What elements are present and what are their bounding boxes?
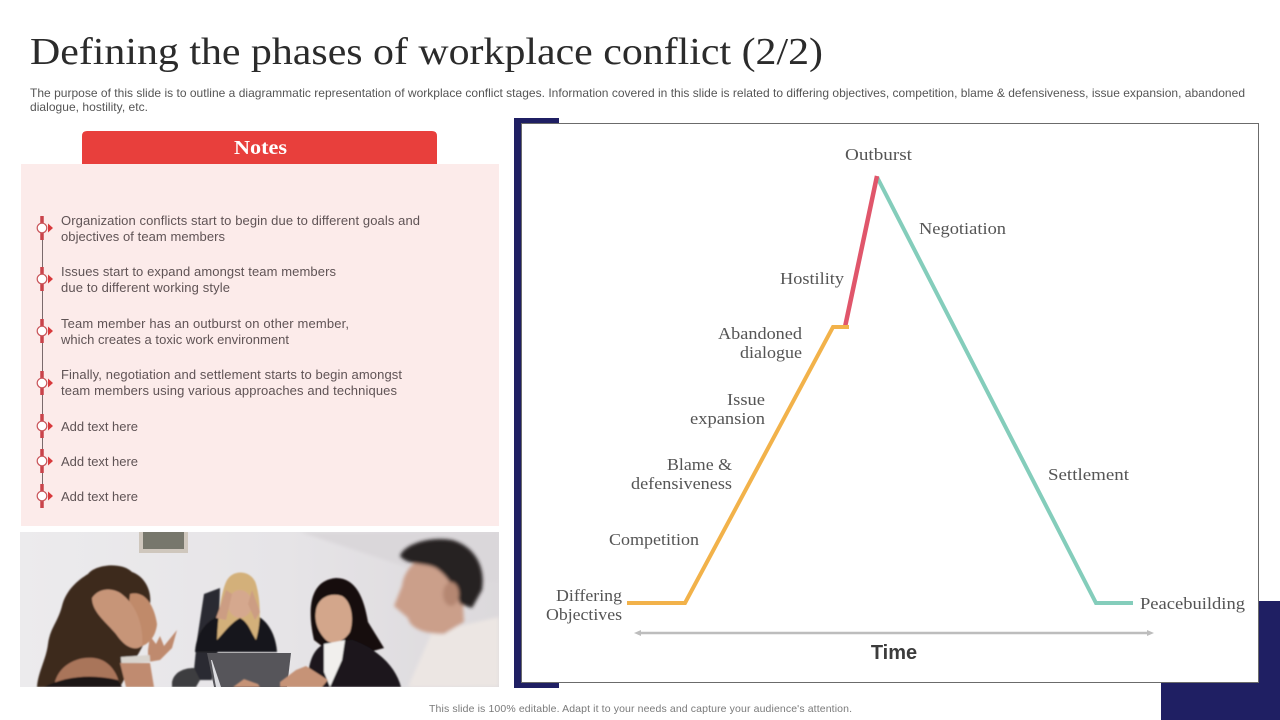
title: Defining the phases of workplace conflict (2/2) [30, 31, 823, 73]
note item 1: objectives of team members [61, 229, 226, 244]
description text: The purpose of this slide is to outline a diagrammatic representation of workplace conflict stages. Information covered in this slide is related to differing objectives, competition, blame & defensiveness, issue expansion, abandoned [30, 86, 1245, 100]
label: peacebuilding: Peacebuilding [1140, 594, 1245, 613]
blonde woman at desk [172, 572, 277, 687]
notes header tab: Notes [234, 137, 287, 159]
axis label: time: Time [871, 642, 917, 664]
line: resolution [877, 177, 1133, 603]
photo: four colleagues in a tense meeting [20, 532, 499, 687]
description text [30, 86, 1245, 114]
note item 3: Team member has an outburst on other member, [61, 316, 349, 331]
label: negotiation: Negotiation [919, 219, 1006, 238]
note item 1: Organization conflicts start to begin due to different goals and [61, 213, 420, 228]
note item 4: team members using various approaches and techniques [61, 383, 398, 398]
label: differing objectives: Differing [556, 586, 622, 605]
arrow: time axis [634, 630, 1154, 636]
note item 2: due to different working style [61, 280, 230, 295]
decorative navy frame corner [514, 118, 1280, 720]
woman with curly hair [37, 565, 177, 687]
label: hostility: Hostility [780, 269, 845, 288]
line: rising conflict [627, 327, 849, 603]
note item 7 [37, 484, 138, 508]
label: settlement: Settlement [1048, 465, 1129, 484]
label: blame and defensiveness [631, 455, 732, 493]
note item 4 [37, 367, 402, 398]
woman with dark hair [233, 578, 401, 687]
note item 3: which creates a toxic work environment [60, 332, 289, 347]
note item 2 [37, 264, 336, 295]
note item 2: Issues start to expand amongst team members [61, 264, 336, 279]
notes body background [21, 164, 499, 526]
note item 6: Add text here [61, 454, 138, 469]
label: blame and defensiveness: Blame & [667, 455, 732, 474]
footer note: This slide is 100% editable. Adapt it to your needs and capture your audience's attention. [429, 703, 852, 715]
panel: conflict chart [522, 124, 1258, 682]
note item 1 [37, 213, 420, 244]
label: issue expansion: Issue [727, 390, 765, 409]
panel: notes [21, 131, 499, 526]
note item 7: Add text here [61, 489, 138, 504]
laptop [207, 653, 291, 687]
note item 4: Finally, negotiation and settlement starts to begin amongst [61, 367, 402, 382]
label: issue expansion [690, 390, 765, 428]
note item 5 [37, 414, 138, 438]
notes header tab [82, 131, 437, 164]
label: abandoned dialogue [718, 324, 803, 362]
label: abandoned dialogue: Abandoned [718, 324, 803, 343]
label: issue expansion: expansion [690, 409, 765, 428]
description text: dialogue, hostility, etc. [30, 100, 148, 114]
chart frame [522, 124, 1258, 682]
line: hostility [845, 176, 877, 327]
label: differing objectives [546, 586, 622, 624]
label: differing objectives: Objectives [546, 605, 622, 624]
label: blame and defensiveness: defensiveness [631, 474, 732, 493]
label: abandoned dialogue: dialogue [740, 343, 802, 362]
label: competition: Competition [609, 530, 699, 549]
note item 5: Add text here [61, 419, 138, 434]
blurred man in white shirt [394, 539, 499, 687]
label: outburst: Outburst [845, 145, 912, 164]
note item 6 [37, 449, 138, 473]
note item 3 [37, 316, 349, 347]
framed picture [139, 532, 188, 553]
timeline connector [42, 228, 44, 496]
